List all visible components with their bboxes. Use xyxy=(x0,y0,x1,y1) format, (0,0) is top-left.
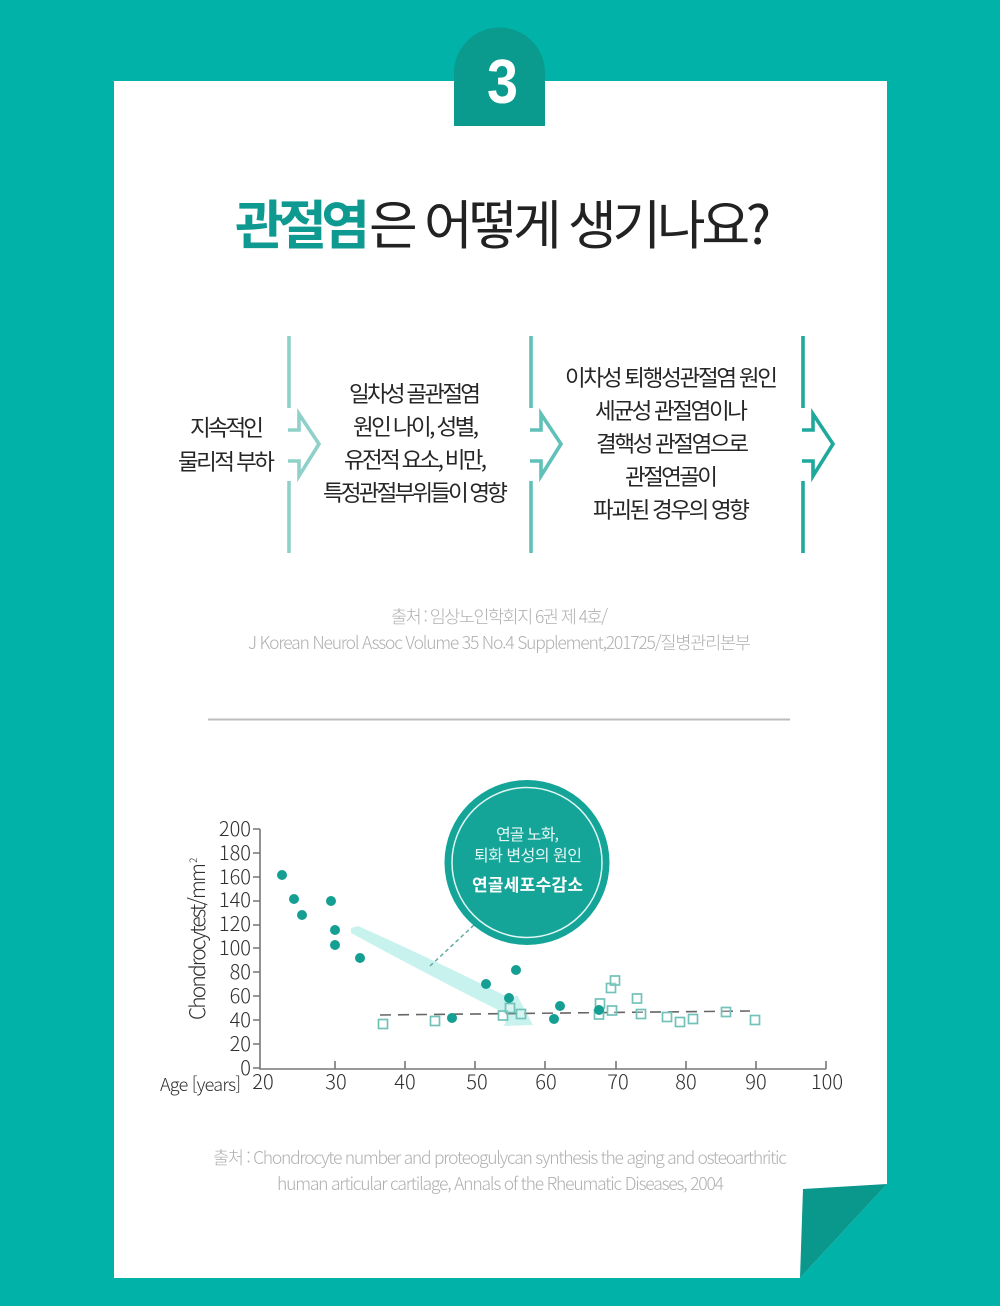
y axis title: Chondrocytest/mm xyxy=(182,863,212,1020)
step 1 text: 지속적인 xyxy=(190,411,264,443)
step 1 text: 물리적 부하 xyxy=(178,445,275,477)
x axis tick labels: 100 xyxy=(811,1066,843,1095)
open square data points xyxy=(378,976,760,1028)
y axis tick labels: 20 xyxy=(230,1028,251,1057)
source note 2: 출처 : Chondrocyte number and proteogulycan synthesis the aging and osteoarthritic xyxy=(213,1145,787,1170)
step 2 text: 원인 나이, 성별, xyxy=(353,410,479,442)
y axis tick labels: 140 xyxy=(219,884,251,913)
x axis tick labels: 70 xyxy=(607,1066,629,1095)
step 3 text: 세균성 관절염이나 xyxy=(595,394,748,426)
step 3 text: 이차성 퇴행성관절염 원인 xyxy=(565,361,778,393)
number badge xyxy=(454,28,545,126)
chart axes xyxy=(253,829,826,1069)
step 3 text: 결핵성 관절염으로 xyxy=(596,427,749,459)
arrow 1 xyxy=(288,336,319,553)
source note 1: 출처 : 임상노인학회지 6권 제 4호/ xyxy=(391,604,608,629)
callout circle xyxy=(444,780,610,945)
x axis tick labels: 60 xyxy=(535,1066,557,1095)
callout circle: 연골 노화, xyxy=(496,821,559,845)
x axis tick labels: 20 xyxy=(252,1066,274,1095)
step 2 text: 유전적 요소, 비만, xyxy=(344,443,487,475)
source note 2 xyxy=(213,1145,787,1196)
callout circle: 퇴화 변성의 원인 xyxy=(474,842,582,866)
x axis title: Age [years] xyxy=(160,1071,241,1097)
number badge: 3 xyxy=(487,48,518,117)
x axis tick labels: 90 xyxy=(745,1066,767,1095)
y axis tick labels: 80 xyxy=(230,956,251,985)
panel: white paper with folded corner xyxy=(114,81,887,1278)
y axis tick labels xyxy=(219,813,251,1081)
y axis tick labels: 0 xyxy=(240,1052,251,1081)
trend arrow xyxy=(351,926,533,1026)
scatter chart xyxy=(160,780,843,1097)
x axis tick labels: 30 xyxy=(325,1066,347,1095)
x axis tick labels: 80 xyxy=(675,1066,697,1095)
y axis tick labels: 120 xyxy=(219,908,251,937)
icon: folded corner xyxy=(800,1184,887,1278)
filled data points xyxy=(277,870,604,1024)
y axis tick labels: 60 xyxy=(230,980,251,1009)
y axis tick labels: 160 xyxy=(219,861,251,890)
arrow 3 xyxy=(802,336,833,553)
step 2 text xyxy=(323,377,508,508)
callout leader line xyxy=(430,925,474,966)
x axis tick labels: 50 xyxy=(466,1066,488,1095)
title: 은 어떻게 생기나요? xyxy=(369,184,771,260)
step 2 text: 특정관절부위들이 영향 xyxy=(323,476,508,508)
source note 1: J Korean Neurol Assoc Volume 35 No.4 Supplement,201725/질병관리본부 xyxy=(248,630,751,655)
y axis tick labels: 180 xyxy=(219,837,251,866)
y axis tick labels: 40 xyxy=(230,1004,251,1033)
step 3 text: 관절연골이 xyxy=(625,460,718,492)
step 3 text xyxy=(565,361,778,525)
y axis tick labels: 200 xyxy=(219,813,251,842)
y axis title: 2 xyxy=(185,858,200,863)
dashed trend line xyxy=(380,1011,750,1015)
callout circle: 연골세포수감소 xyxy=(472,871,583,896)
step 2 text: 일차성 골관절염 xyxy=(349,377,481,409)
title: 관절염 xyxy=(235,184,370,260)
step 3 text: 파괴된 경우의 영향 xyxy=(593,493,750,525)
arrow 2 xyxy=(530,336,561,553)
source note 2: human articular cartilage, Annals of the Rheumatic Diseases, 2004 xyxy=(277,1171,724,1196)
x axis tick labels xyxy=(252,1066,843,1095)
source note 1 xyxy=(248,604,751,655)
y axis tick labels: 100 xyxy=(219,932,251,961)
x axis tick labels: 40 xyxy=(394,1066,416,1095)
step 1 text xyxy=(178,411,275,477)
